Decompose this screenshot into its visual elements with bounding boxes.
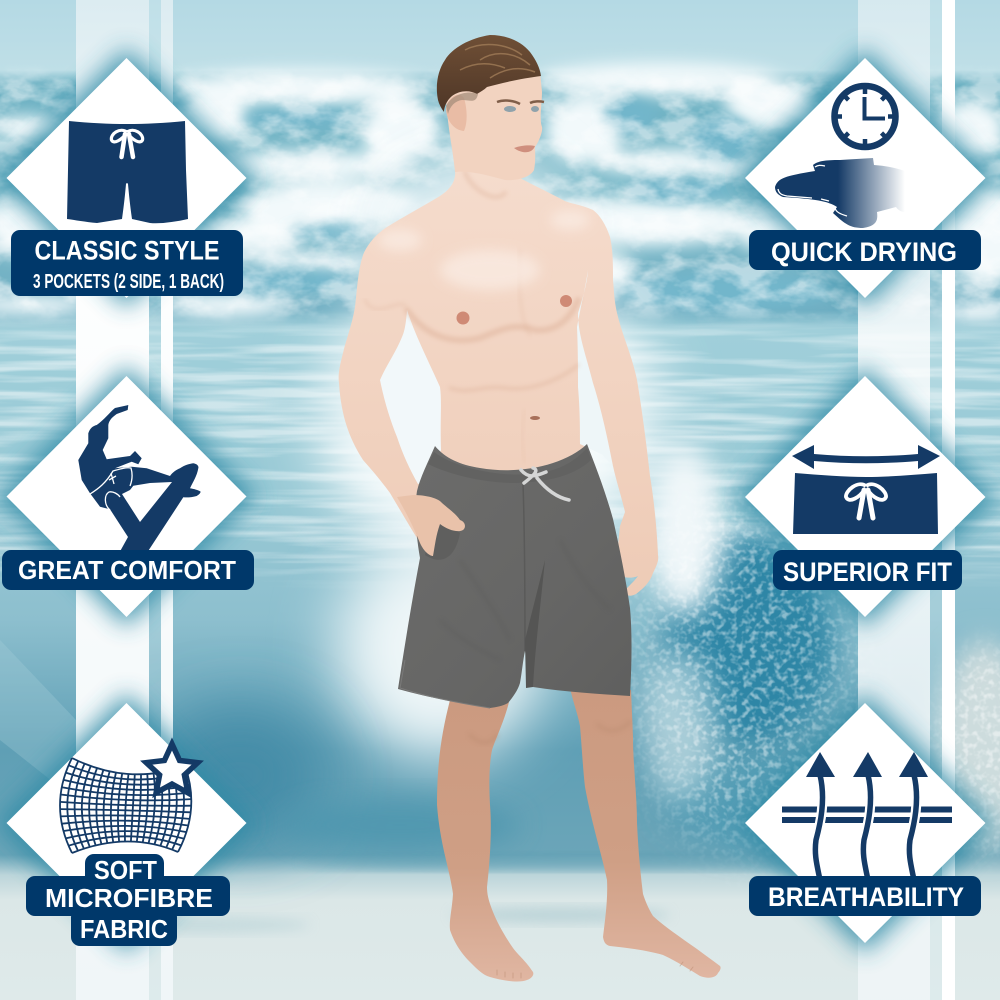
panel: quick drying (734, 48, 996, 308)
diamond (6, 376, 246, 617)
diamond glow (734, 366, 996, 627)
label: breathability: BREATHABILITY (768, 882, 964, 912)
left hand in pocket (397, 495, 465, 556)
deep water shadows (155, 705, 325, 845)
diamond (745, 58, 986, 298)
wave blue pockets (215, 98, 830, 312)
muscle shading (365, 172, 578, 462)
label: quick drying: QUICK DRYING (771, 237, 957, 267)
icon: clock (834, 86, 896, 147)
diamond (745, 703, 986, 943)
diamond glow (0, 693, 257, 953)
label: great comfort: GREAT COMFORT (18, 555, 236, 585)
grey swim shorts (398, 444, 632, 708)
diamond glow (0, 366, 257, 627)
nipples and navel (456, 295, 572, 420)
chest highlights (378, 210, 590, 290)
label: soft microfibre fabric: SOFT (94, 855, 157, 885)
panel: breathability (734, 693, 996, 953)
diamond (745, 376, 986, 617)
surfer shorts detail (90, 468, 132, 510)
icon: width arrow (792, 445, 940, 469)
panel: soft microfibre fabric (0, 693, 257, 953)
model torso, arms and neck (339, 165, 658, 596)
label: soft microfibre fabric: FABRIC (80, 914, 168, 944)
diamond (6, 703, 246, 943)
panel: superior fit (734, 366, 996, 627)
icon: swim shorts (67, 121, 188, 223)
label: superior fit (773, 550, 962, 590)
label: soft microfibre fabric: MICROFIBRE (45, 883, 213, 913)
diamond (6, 58, 246, 298)
inner arm gaps showing background (380, 270, 613, 484)
head and face (437, 35, 544, 180)
icon: star (146, 744, 198, 793)
drawstring (521, 468, 569, 500)
label: soft microfibre fabric (26, 854, 230, 946)
label: classic style (11, 230, 243, 296)
icon: drying puddle (775, 158, 917, 228)
panel: great comfort (0, 366, 257, 627)
icon: surfer (78, 405, 201, 553)
wave foam clumps (0, 63, 1000, 320)
model wearing grey swim shorts (339, 35, 721, 981)
model legs and feet (437, 688, 721, 981)
label: superior fit: SUPERIOR FIT (783, 557, 952, 587)
diamond glow (734, 693, 996, 953)
label: classic style: 3 POCKETS (2 SIDE, 1 BACK) (33, 271, 224, 293)
icon: airflow arrows (806, 752, 928, 880)
icon: mesh fabric (60, 758, 191, 853)
haze behind model (320, 270, 660, 570)
panel: classic style (0, 48, 257, 308)
knee and toe shading (470, 722, 693, 978)
diamond glow (734, 48, 996, 308)
icon: fabric layers (782, 810, 952, 820)
label: quick drying (749, 230, 981, 270)
icon: waistband (793, 473, 938, 534)
label: classic style: CLASSIC STYLE (34, 236, 220, 266)
label: breathability (749, 876, 981, 916)
diamond glow (0, 48, 257, 308)
label: great comfort (2, 550, 254, 590)
